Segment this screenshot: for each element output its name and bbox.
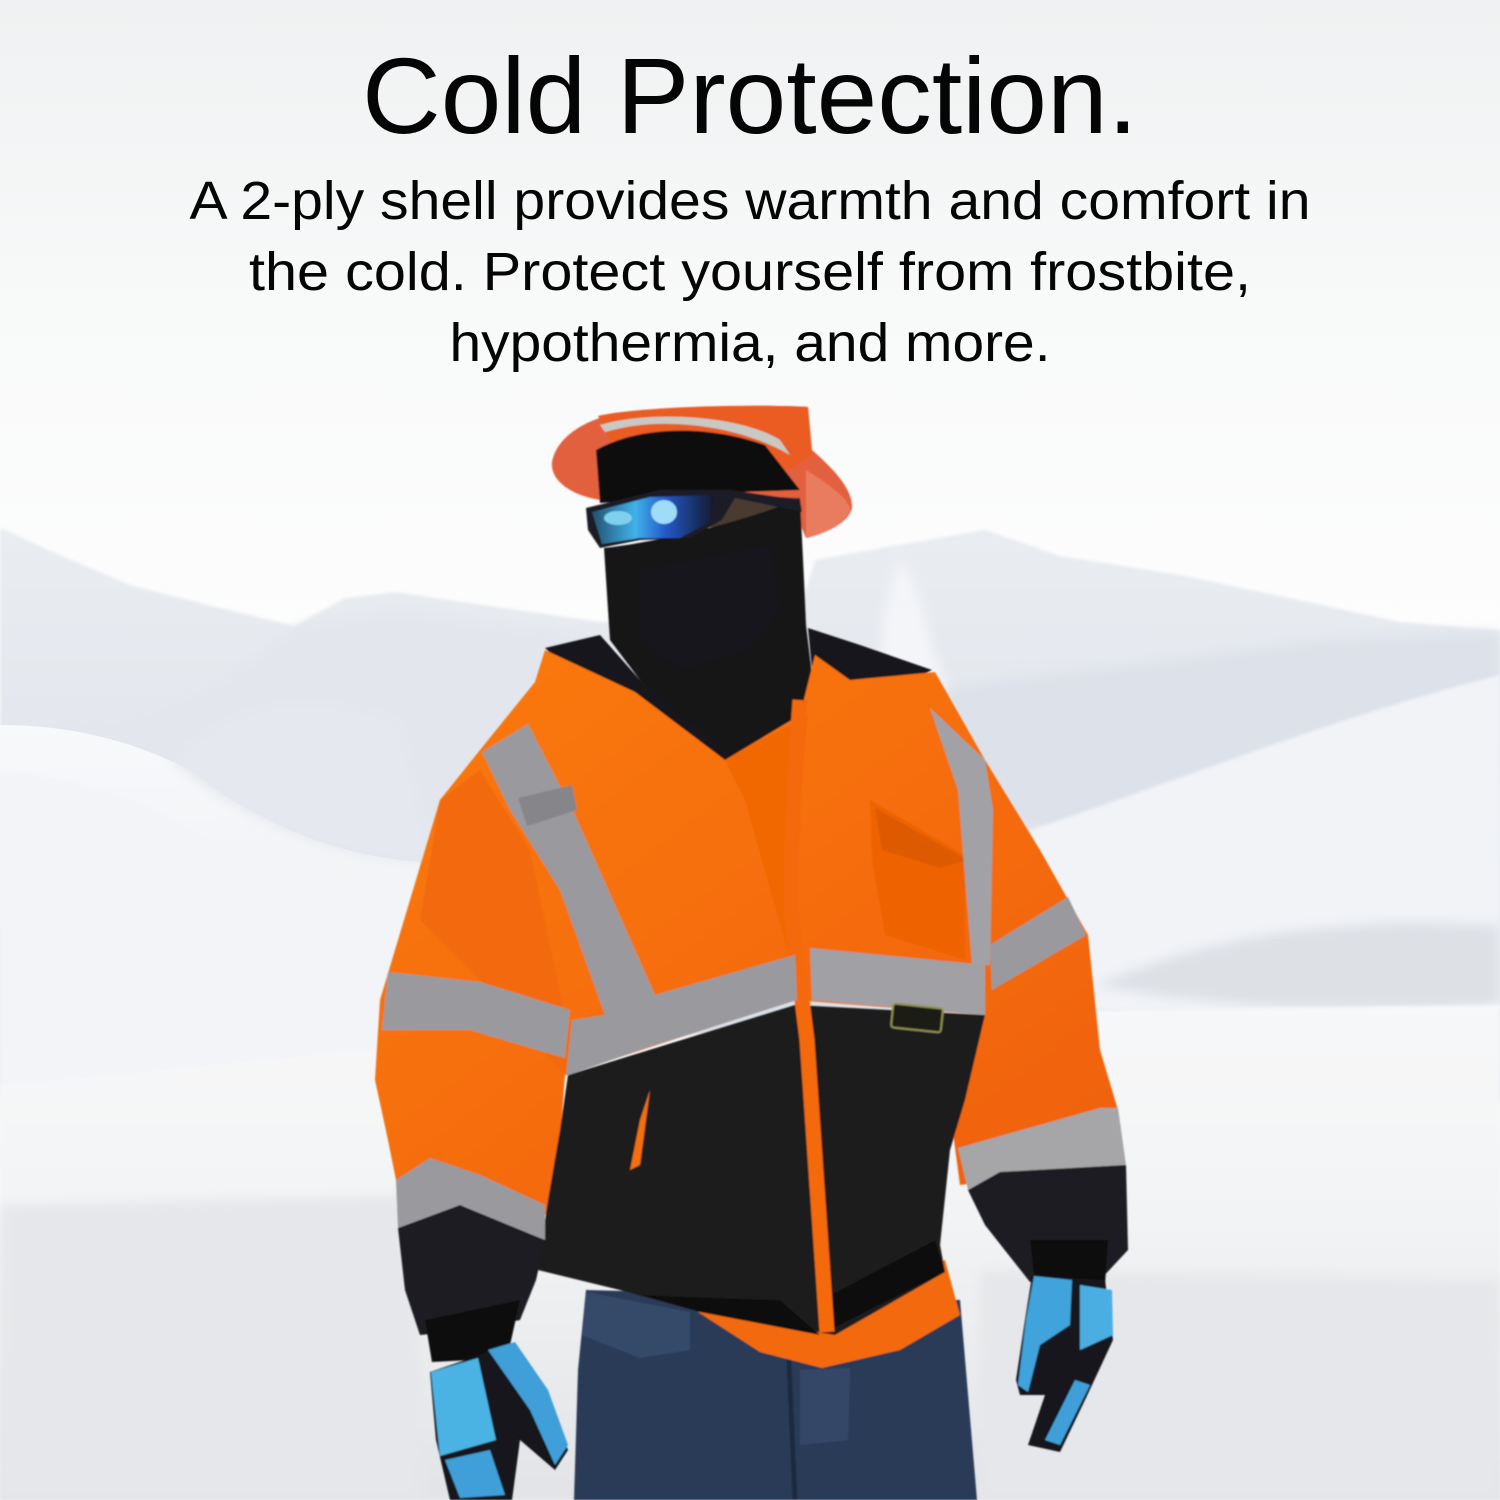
description text block — [190, 171, 1310, 373]
black sleeve cuffs — [398, 1165, 1128, 1362]
title: Cold Protection. — [362, 35, 1138, 156]
description text block: hypothermia, and more. — [450, 313, 1050, 373]
jacket brand label — [891, 1003, 943, 1033]
jeans — [574, 1290, 977, 1500]
left glove — [430, 1342, 568, 1500]
hard hat — [552, 406, 852, 538]
sunglasses — [586, 490, 802, 548]
jacket black lower panel — [538, 1005, 985, 1335]
right glove — [1016, 1276, 1113, 1452]
jacket collar lining — [545, 628, 932, 790]
description text block: A 2-ply shell provides warmth and comfort in — [190, 171, 1310, 231]
jacket orange body — [375, 650, 1125, 1215]
orange undershirt hem — [698, 1260, 960, 1368]
balaclava and face mask — [596, 431, 815, 760]
description text block: the cold. Protect yourself from frostbite, — [249, 242, 1251, 302]
reflective stripes — [382, 708, 1126, 1240]
worker figure — [375, 406, 1128, 1500]
jacket centre zipper — [792, 700, 827, 1332]
